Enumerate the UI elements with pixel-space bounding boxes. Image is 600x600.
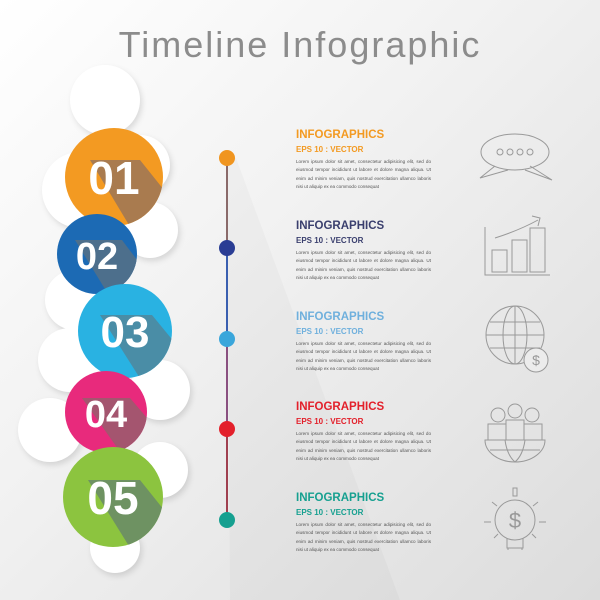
circle 04: 04 <box>85 394 127 436</box>
white bubbles background <box>18 65 190 573</box>
text block 5 <box>296 492 431 552</box>
text block 4: EPS 10 : VECTOR <box>296 417 363 426</box>
circle 03 <box>78 284 172 378</box>
text block 2 <box>296 220 431 280</box>
text block 3: INFOGRAPHICS <box>296 311 384 323</box>
circle 04 <box>65 371 147 451</box>
text block 4: Lorem ipsum dolor sit amet, consectetur adipisicing elit, sed do eiusmod tempor incididunt ut labore et dolore magna aliqua. Ut enim ad minim veniam, quis nostrud exercitation ullamco laboris nisi ut aliquip ex ea commodo consequat <box>296 431 431 461</box>
text block 5: EPS 10 : VECTOR <box>296 508 363 517</box>
text block 5: Lorem ipsum dolor sit amet, consectetur adipisicing elit, sed do eiusmod tempor incididunt ut labore et dolore magna aliqua. Ut enim ad minim veniam, quis nostrud exercitation ullamco laboris nisi ut aliquip ex ea commodo consequat <box>296 522 431 552</box>
circle 02 <box>57 214 137 294</box>
circle 05 <box>63 447 163 547</box>
text block 1 <box>296 129 431 189</box>
icons column <box>480 134 552 550</box>
text block 1: Lorem ipsum dolor sit amet, consectetur adipisicing elit, sed do eiusmod tempor incididunt ut labore et dolore magna aliqua. Ut enim ad minim veniam, quis nostrud exercitation ullamco laboris nisi ut aliquip ex ea commodo consequat <box>296 159 431 189</box>
text block 2: INFOGRAPHICS <box>296 220 384 232</box>
title: Timeline Infographic <box>119 24 481 65</box>
circle 01: 01 <box>88 152 140 204</box>
text block 4 <box>296 401 431 461</box>
icon: light bulb: $ <box>509 508 521 533</box>
icon: globe dollar: $ <box>532 352 540 368</box>
icon: bar chart <box>485 216 550 275</box>
text block 2: EPS 10 : VECTOR <box>296 236 363 245</box>
icon: people globe <box>485 404 545 462</box>
text block 1: EPS 10 : VECTOR <box>296 145 363 154</box>
text block 4: INFOGRAPHICS <box>296 401 384 413</box>
icon: light bulb <box>484 488 546 552</box>
text block 3 <box>296 311 431 371</box>
circles and timeline graphic <box>18 73 235 578</box>
circle 01 <box>65 128 163 225</box>
text block 1: INFOGRAPHICS <box>296 129 384 141</box>
circle 03: 03 <box>101 308 149 357</box>
text block 5: INFOGRAPHICS <box>296 492 384 504</box>
timeline line <box>226 158 228 520</box>
text block 3: EPS 10 : VECTOR <box>296 327 363 336</box>
long shadow of timeline <box>227 158 400 600</box>
text block 2: Lorem ipsum dolor sit amet, consectetur adipisicing elit, sed do eiusmod tempor incididunt ut labore et dolore magna aliqua. Ut enim ad minim veniam, quis nostrud exercitation ullamco laboris nisi ut aliquip ex ea commodo consequat <box>296 250 431 280</box>
text block 3: Lorem ipsum dolor sit amet, consectetur adipisicing elit, sed do eiusmod tempor incididunt ut labore et dolore magna aliqua. Ut enim ad minim veniam, quis nostrud exercitation ullamco laboris nisi ut aliquip ex ea commodo consequat <box>296 341 431 371</box>
circle 02: 02 <box>76 236 118 278</box>
icon: globe dollar <box>486 306 548 372</box>
timeline dots <box>219 150 235 528</box>
icon: speech bubble <box>480 134 552 180</box>
circle 05: 05 <box>87 472 139 524</box>
